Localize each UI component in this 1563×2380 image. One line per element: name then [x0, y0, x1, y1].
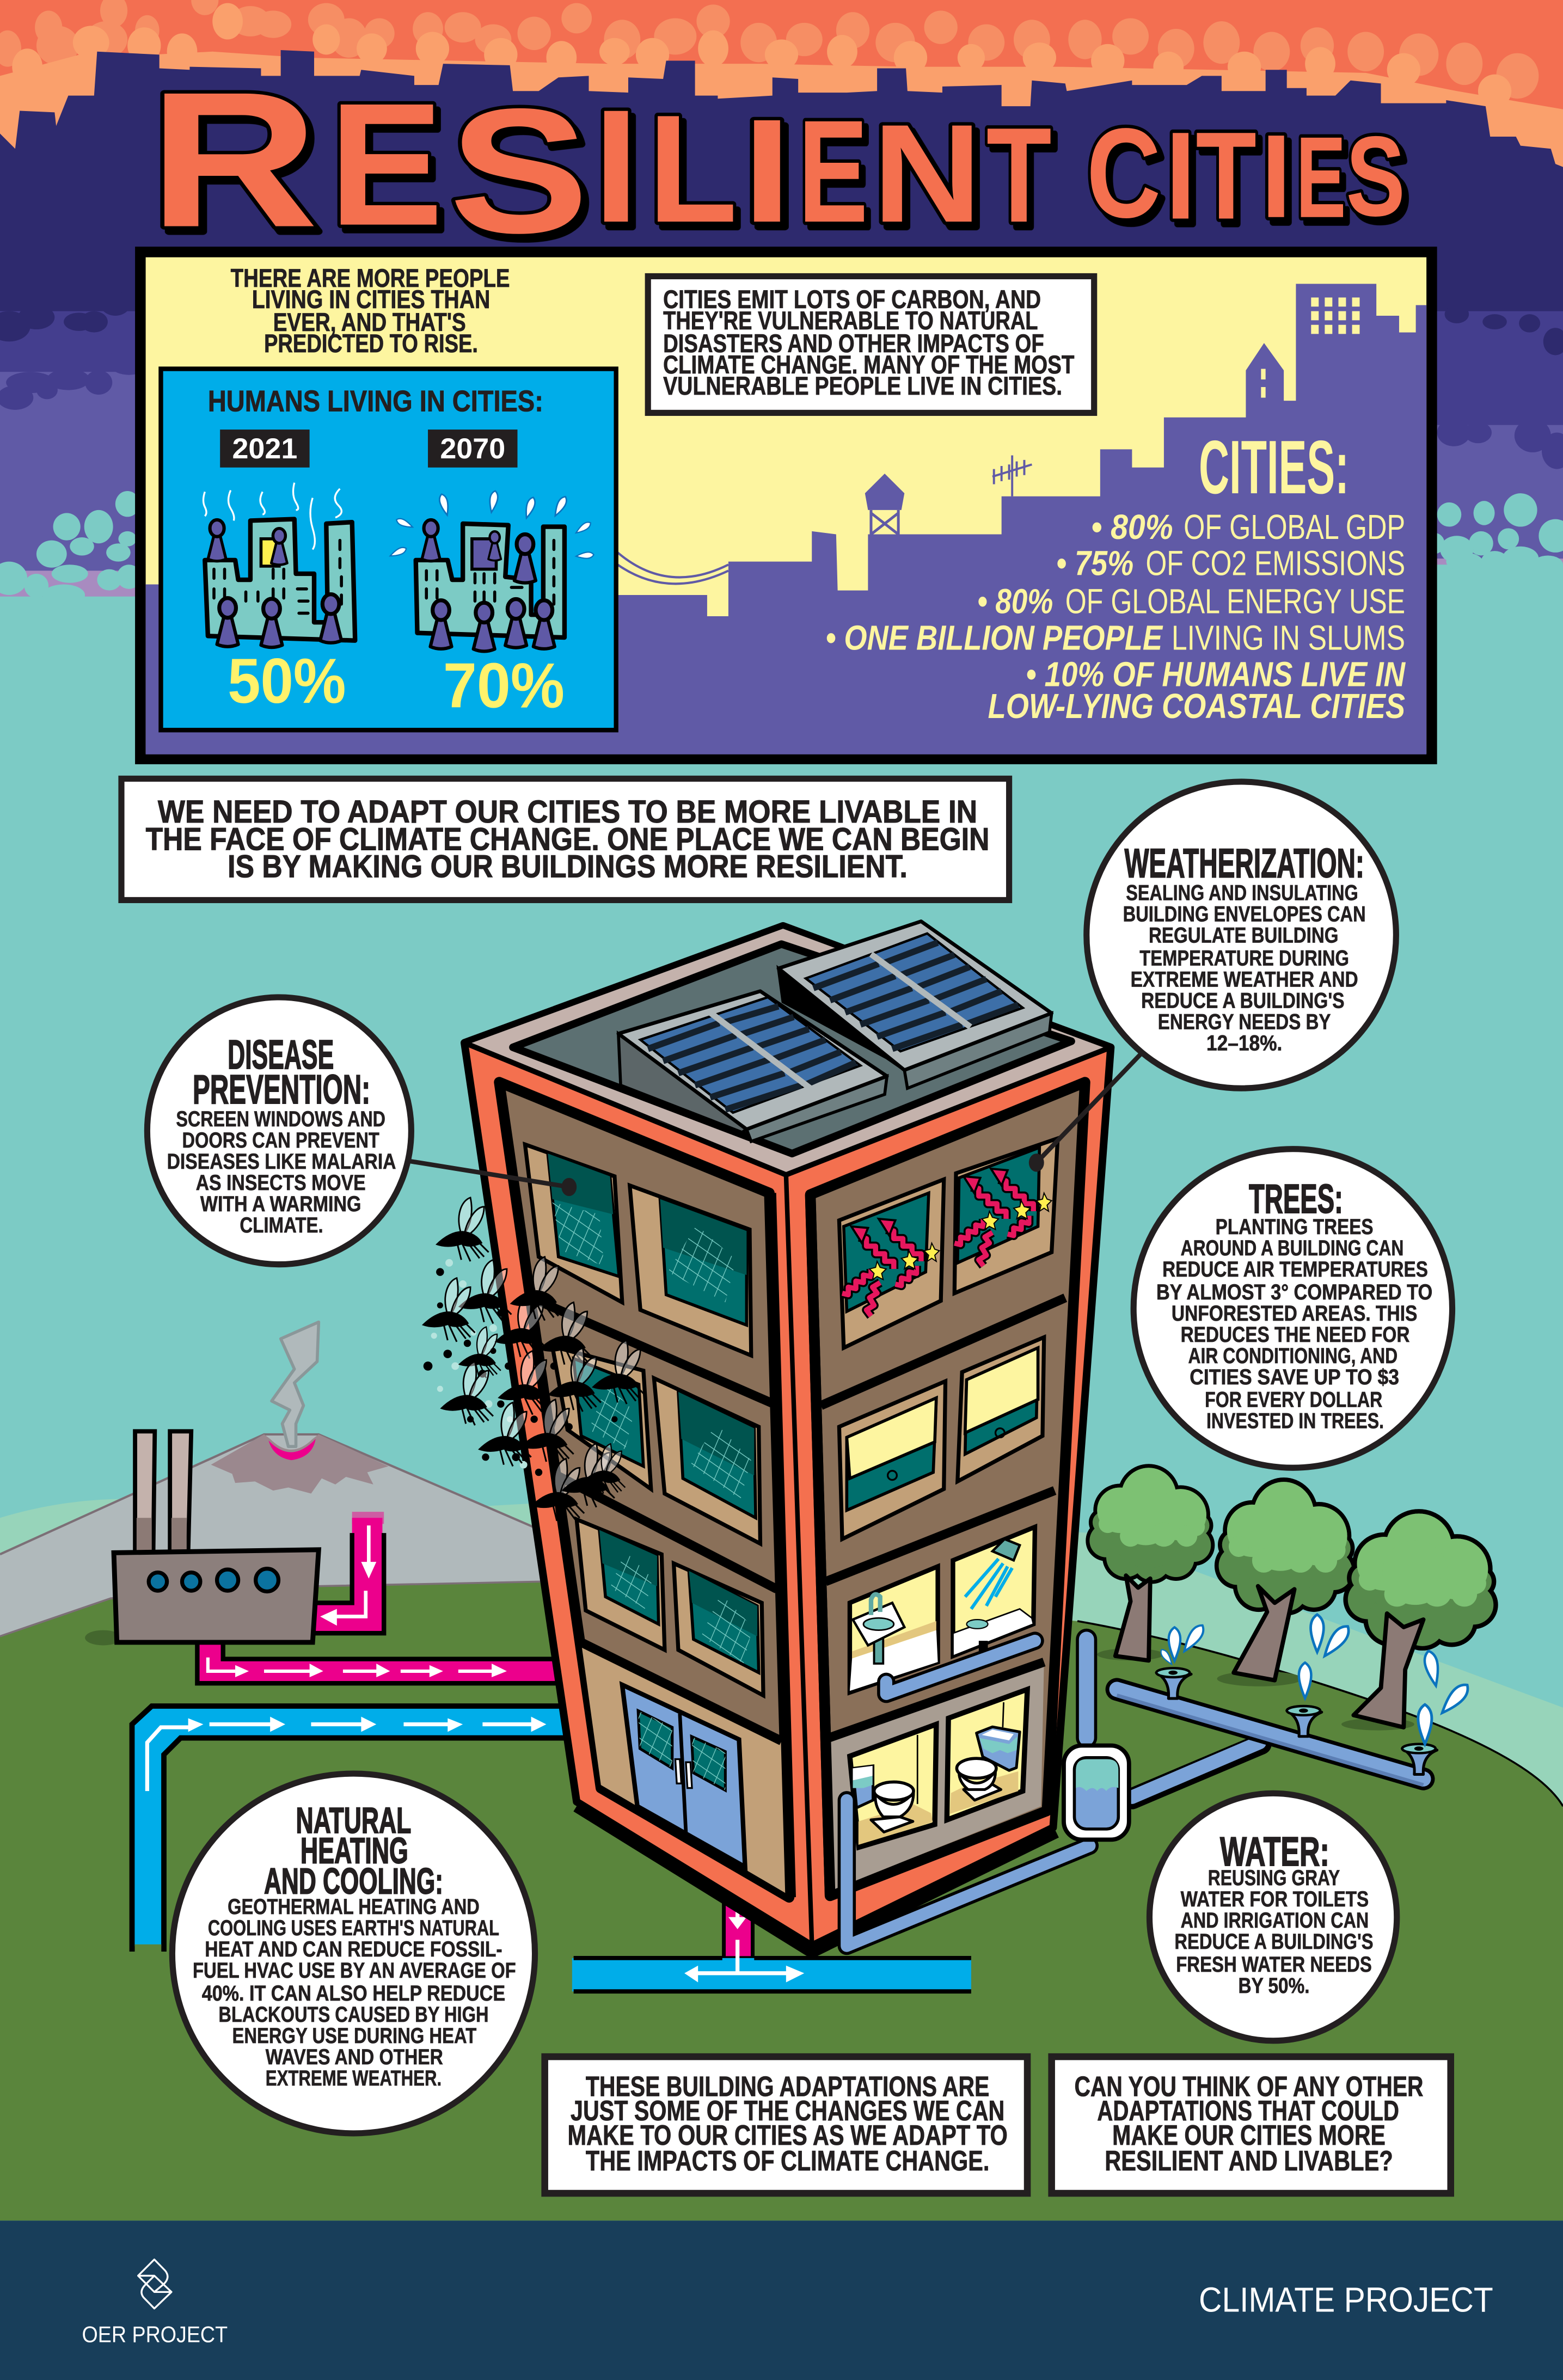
- icon: OER logo: [138, 2260, 171, 2309]
- callout: trees: AIR CONDITIONING, AND: [1188, 1344, 1397, 1368]
- stat: 70%: 70%: [443, 649, 565, 721]
- label: 2021: 2021: [232, 433, 297, 465]
- pipe: under building: [572, 1882, 971, 1991]
- callout: trees: REDUCE AIR TEMPERATURES: [1162, 1257, 1428, 1281]
- callout: water: [1149, 1793, 1397, 2041]
- callout: disease prevention: [147, 997, 411, 1265]
- icon: factory: [85, 1431, 318, 1645]
- city silhouette: [146, 284, 1426, 755]
- panel background: [140, 252, 1432, 759]
- toilet window 1: [850, 1724, 936, 1847]
- title: E: [1296, 113, 1346, 242]
- title: T: [1196, 106, 1256, 246]
- callout: weatherization: TEMPERATURE DURING: [1139, 946, 1349, 970]
- panel: humans living in cities: [161, 369, 616, 730]
- label: 2021: [220, 430, 310, 468]
- chart heading: HUMANS LIVING IN CITIES:: [208, 385, 543, 418]
- callout: adapt our cities: [121, 778, 1009, 900]
- callout: natural heating and cooling: HEATING: [301, 1831, 408, 1872]
- callout: natural heating and cooling: COOLING USES EARTH'S NATURAL: [208, 1916, 499, 1940]
- callout: natural heating and cooling: AND COOLING:: [264, 1861, 443, 1901]
- callout: natural heating and cooling: NATURAL: [296, 1800, 411, 1841]
- title: I: [593, 76, 639, 256]
- gray water pipes: [847, 1639, 1089, 1946]
- list: city facts: OF CO2 EMISSIONS: [1145, 544, 1405, 583]
- callout: disease prevention: DOORS CAN PREVENT: [182, 1128, 379, 1152]
- intro text: PREDICTED TO RISE.: [264, 329, 478, 358]
- left floor 2 windows: [553, 1346, 760, 1544]
- callout: adapt our cities: THE FACE OF CLIMATE CHANGE. ONE PLACE WE CAN BEGIN: [146, 821, 989, 857]
- callout: water: WATER FOR TOILETS: [1181, 1887, 1369, 1911]
- Climate Project label: CLIMATE PROJECT: [1199, 2280, 1493, 2320]
- background: dark city skyline and dusk bands: [0, 50, 1563, 794]
- callout: water: WATER:: [1220, 1829, 1329, 1874]
- list: city facts: • 10% OF HUMANS LIVE IN: [1026, 654, 1406, 694]
- callout: carbon: [648, 276, 1094, 413]
- icon: volcano: [211, 1322, 389, 1494]
- icon: city in 2021: [204, 483, 355, 647]
- list: city facts: • ONE BILLION PEOPLE: [825, 618, 1163, 657]
- right floor 1 windows with heat: [839, 1138, 1058, 1348]
- callout: building adaptations: [545, 2057, 1027, 2193]
- callout: disease prevention: PREVENTION:: [193, 1066, 370, 1112]
- list: city facts: • 80%: [1091, 507, 1173, 547]
- sprinkler 2: [1287, 1706, 1322, 1737]
- left floor 3 windows: [577, 1519, 763, 1695]
- trees: [1089, 1468, 1493, 1731]
- callout: trees: REDUCES THE NEED FOR: [1181, 1322, 1409, 1347]
- water tower: [865, 474, 904, 534]
- callout: disease prevention: CLIMATE.: [240, 1213, 323, 1237]
- callout: trees: FOR EVERY DOLLAR: [1205, 1388, 1382, 1412]
- callout: trees: PLANTING TREES: [1216, 1214, 1374, 1239]
- title: R: [149, 52, 318, 267]
- water tank: [1064, 1746, 1129, 1839]
- callout: weatherization: ENERGY NEEDS BY: [1158, 1009, 1331, 1034]
- right floor 2 windows: [839, 1337, 1044, 1539]
- callout: question: MAKE OUR CITIES MORE: [1112, 2119, 1386, 2151]
- label: 2070: [428, 430, 517, 468]
- sprinkler 3: [1402, 1744, 1437, 1774]
- title: E: [798, 90, 868, 253]
- antenna: [992, 455, 1032, 496]
- OER Project wordmark: OER PROJECT: [82, 2321, 228, 2347]
- callout: carbon: CITIES EMIT LOTS OF CARBON, AND: [663, 285, 1041, 314]
- callout: weatherization: WEATHERIZATION:: [1124, 841, 1364, 886]
- callout: weatherization: REGULATE BUILDING: [1149, 923, 1338, 948]
- pipe: magenta from volcano: [311, 1512, 384, 1633]
- list: city facts: • 80%: [977, 581, 1053, 621]
- title: N: [873, 96, 982, 252]
- callout: weatherization: SEALING AND INSULATING: [1126, 880, 1358, 905]
- callout: carbon: DISASTERS AND OTHER IMPACTS OF: [663, 329, 1044, 358]
- roof: [464, 921, 1111, 1175]
- callout: carbon: CLIMATE CHANGE. MANY OF THE MOST: [663, 351, 1075, 379]
- title: [149, 52, 1405, 271]
- water drops: [1159, 1615, 1472, 1744]
- callout: water: FRESH WATER NEEDS: [1176, 1952, 1372, 1977]
- callout: disease prevention: WITH A WARMING: [200, 1192, 361, 1216]
- toilet window 2: [947, 1689, 1027, 1820]
- callout: weatherization: 12–18%.: [1206, 1030, 1282, 1055]
- bathroom window: sink: [850, 1566, 938, 1692]
- callout: trees: AROUND A BUILDING CAN: [1181, 1236, 1403, 1260]
- callout: carbon: THEY'RE VULNERABLE TO NATURAL: [663, 306, 1038, 335]
- intro text: [231, 264, 510, 358]
- tree 3: [1341, 1513, 1493, 1731]
- callout: building adaptations: THESE BUILDING ADAPTATIONS ARE: [586, 2071, 989, 2102]
- callout leaders: [410, 1047, 1147, 1196]
- right facade: [810, 1082, 1085, 1896]
- callout: weatherization: REDUCE A BUILDING'S: [1141, 988, 1345, 1013]
- title: T: [986, 99, 1052, 250]
- irrigation pipes and sprinklers: [1117, 1615, 1472, 1799]
- callout: disease prevention: DISEASES LIKE MALARIA: [167, 1149, 396, 1174]
- callout: natural heating and cooling: ENERGY USE DURING HEAT: [232, 2023, 477, 2048]
- callout: disease prevention: AS INSECTS MOVE: [196, 1170, 366, 1195]
- label: 2070: 2070: [440, 433, 505, 465]
- callout: water: AND IRRIGATION CAN: [1181, 1908, 1369, 1933]
- power lines: [617, 553, 728, 584]
- list: city facts: LOW-LYING COASTAL CITIES: [988, 686, 1405, 726]
- callout: question: ADAPTATIONS THAT COULD: [1097, 2095, 1399, 2126]
- left facade: [499, 1082, 789, 1897]
- callout: trees: INVESTED IN TREES.: [1206, 1409, 1384, 1433]
- callout: natural heating and cooling: [172, 1774, 535, 2133]
- intro text: THERE ARE MORE PEOPLE: [231, 264, 510, 293]
- background: lower sky, mountain, ground: [0, 1434, 1563, 2220]
- list: city facts: LIVING IN SLUMS: [1172, 618, 1405, 657]
- callout: adapt our cities: IS BY MAKING OUR BUILDINGS MORE RESILIENT.: [228, 849, 908, 885]
- callout: weatherization: [1087, 782, 1396, 1088]
- panel: city facts: [140, 252, 1432, 759]
- callout: trees: [1133, 1149, 1452, 1468]
- background: sunset sky: [0, 0, 1563, 197]
- building: [464, 921, 1129, 1952]
- callout: water: REUSING GRAY: [1208, 1866, 1340, 1890]
- callout: carbon: VULNERABLE PEOPLE LIVE IN CITIES.: [663, 372, 1062, 401]
- building shell: [464, 926, 1111, 1946]
- title: L: [648, 83, 738, 254]
- title: C: [1087, 102, 1161, 244]
- intro text: EVER, AND THAT'S: [273, 308, 466, 337]
- callout: water: REDUCE A BUILDING'S: [1174, 1929, 1374, 1954]
- callout: natural heating and cooling: EXTREME WEATHER.: [266, 2066, 442, 2090]
- title: I: [1261, 111, 1291, 243]
- callout: building adaptations: MAKE TO OUR CITIES AS WE ADAPT TO: [567, 2119, 1008, 2151]
- intro text: LIVING IN CITIES THAN: [252, 285, 490, 314]
- list: city facts: OF GLOBAL ENERGY USE: [1065, 581, 1405, 621]
- ground floors: [581, 1642, 788, 1894]
- title: I: [742, 89, 792, 253]
- callout: question: RESILIENT AND LIVABLE?: [1105, 2145, 1393, 2176]
- callout: disease prevention: SCREEN WINDOWS AND: [176, 1107, 385, 1131]
- geothermal pipes: [132, 1512, 971, 1991]
- callout: trees: CITIES SAVE UP TO $3: [1190, 1365, 1399, 1389]
- callout: building adaptations: THE IMPACTS OF CLIMATE CHANGE.: [586, 2145, 989, 2176]
- left floor 1 windows: [525, 1144, 751, 1355]
- silhouette windows: [1261, 297, 1359, 398]
- list: city facts: [825, 507, 1406, 726]
- callout: natural heating and cooling: BLACKOUTS CAUSED BY HIGH: [218, 2002, 489, 2027]
- stat: 50%: 50%: [228, 645, 346, 716]
- tree 1: [1089, 1468, 1211, 1660]
- callout: trees: BY ALMOST 3° COMPARED TO: [1156, 1280, 1432, 1304]
- door: [622, 1685, 745, 1867]
- callout: natural heating and cooling: WAVES AND OTHER: [266, 2045, 443, 2069]
- callout: adapt our cities: WE NEED TO ADAPT OUR CITIES TO BE MORE LIVABLE IN: [158, 794, 977, 830]
- callout: trees: UNFORESTED AREAS. THIS: [1172, 1301, 1417, 1326]
- callout: question: [1052, 2057, 1451, 2193]
- mosquito swarm: [422, 1198, 645, 1523]
- callout: natural heating and cooling: GEOTHERMAL HEATING AND: [228, 1894, 480, 1919]
- heading: cities: CITIES:: [1199, 425, 1349, 510]
- list: city facts: • 75%: [1056, 544, 1133, 583]
- solar panel 2: [779, 921, 1052, 1088]
- callout: building adaptations: JUST SOME OF THE CHANGES WE CAN: [571, 2095, 1004, 2126]
- icon: city in 2070: [389, 490, 594, 651]
- footer: [0, 2220, 1563, 2380]
- callout: natural heating and cooling: FUEL HVAC USE BY AN AVERAGE OF: [193, 1958, 516, 1983]
- pipe: blue incoming: [132, 1706, 567, 1952]
- title: I: [1166, 106, 1196, 246]
- callout: disease prevention: DISEASE: [228, 1032, 334, 1077]
- sprinkler 1: [1156, 1668, 1191, 1698]
- callout: question: CAN YOU THINK OF ANY OTHER: [1074, 2071, 1424, 2102]
- bathroom window: shower: [953, 1527, 1035, 1656]
- callout: weatherization: BUILDING ENVELOPES CAN: [1123, 901, 1366, 926]
- list: city facts: OF GLOBAL GDP: [1184, 507, 1405, 547]
- callout: water: BY 50%.: [1239, 1973, 1310, 1998]
- callout: natural heating and cooling: 40%. IT CAN ALSO HELP REDUCE: [202, 1981, 505, 2005]
- title: E: [329, 67, 443, 262]
- callout: trees: TREES:: [1249, 1176, 1343, 1222]
- title: S: [449, 72, 589, 271]
- pipe: magenta to building: [197, 1639, 561, 1683]
- title: S: [1346, 113, 1405, 240]
- tree 2: [1217, 1482, 1352, 1686]
- solar panel 1: [618, 991, 887, 1142]
- callout: weatherization: EXTREME WEATHER AND: [1131, 967, 1358, 991]
- callout: natural heating and cooling: HEAT AND CAN REDUCE FOSSIL-: [205, 1937, 502, 1961]
